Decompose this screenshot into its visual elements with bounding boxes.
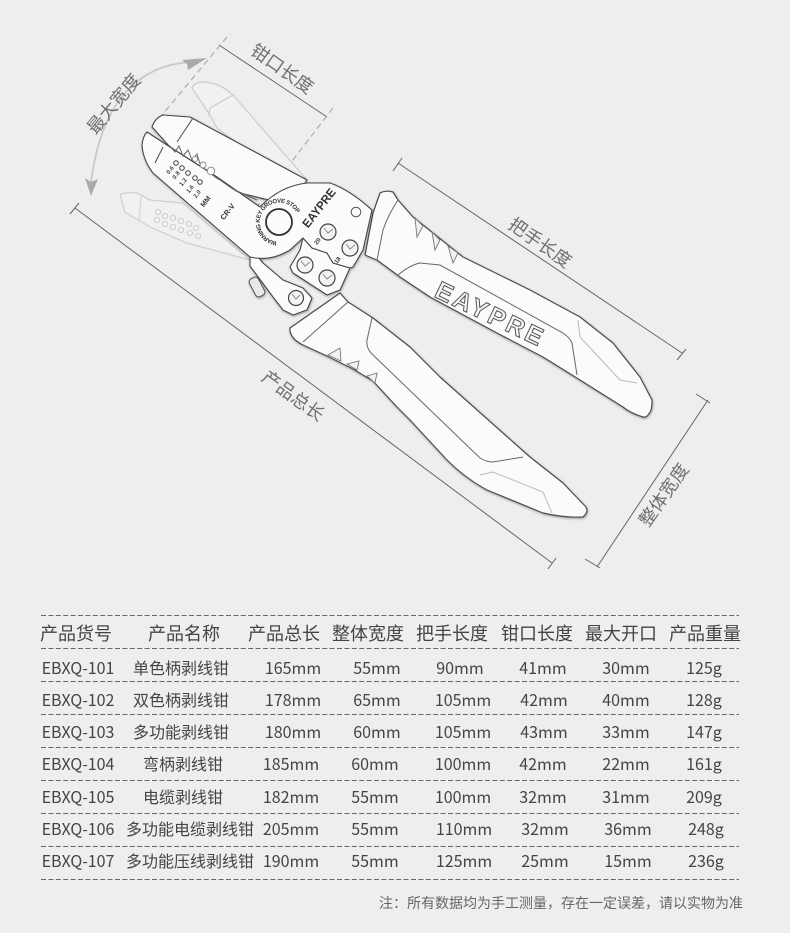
row EBXQ-107: 25mm: [521, 848, 569, 872]
strip size marks: 2.0: [191, 188, 203, 200]
row EBXQ-105: 32mm: [519, 784, 567, 808]
lower handle collar: [303, 302, 348, 342]
row EBXQ-101: [42, 655, 722, 679]
head hole: [351, 207, 361, 217]
brand on handle: EAYPRE: [431, 276, 547, 352]
table header: 整体宽度: [332, 620, 404, 646]
dimension: jaw length: [162, 37, 333, 213]
strip size marks: [164, 164, 203, 200]
row EBXQ-104: 185mm: [263, 751, 319, 775]
strip size marks: 0.6: [164, 164, 176, 176]
lower handle grip ribs: [328, 348, 377, 383]
row EBXQ-103: 多功能剥线钳: [133, 719, 229, 743]
dimension: maximum opening arc: 最大宽度: [80, 67, 146, 139]
row EBXQ-104: [42, 751, 722, 775]
row EBXQ-104: 60mm: [351, 751, 399, 775]
row EBXQ-106: 多功能电缆剥线钳: [126, 816, 254, 840]
table header: 最大开口: [585, 620, 657, 646]
row EBXQ-105: 31mm: [602, 784, 650, 808]
row EBXQ-102: [42, 687, 722, 711]
row EBXQ-101: 125g: [686, 655, 722, 679]
row EBXQ-106: 205mm: [263, 816, 319, 840]
pliers: upper handle: [365, 191, 652, 417]
row EBXQ-107: EBXQ-107: [42, 848, 115, 872]
row EBXQ-106: 248g: [688, 816, 724, 840]
row EBXQ-106: 110mm: [436, 816, 492, 840]
row EBXQ-104: EBXQ-104: [42, 751, 115, 775]
row EBXQ-104: 弯柄剥线钳: [143, 751, 223, 775]
row EBXQ-107: 多功能压线剥线钳: [126, 848, 254, 872]
row EBXQ-104: 22mm: [602, 751, 650, 775]
crimp size labels: 20: [314, 237, 323, 246]
lower handle tip texture: [480, 472, 552, 513]
ghost: open upper jaw: [192, 82, 307, 180]
upper jaw: [152, 115, 307, 205]
row EBXQ-105: [42, 784, 722, 808]
row EBXQ-103: 105mm: [435, 719, 491, 743]
pliers: head and jaws: [140, 114, 374, 318]
row EBXQ-102: EBXQ-102: [42, 687, 115, 711]
footnote: 注：所有数据均为手工测量，存在一定误差，请以实物为准: [379, 893, 743, 913]
table header: 钳口长度: [501, 620, 573, 646]
row EBXQ-102: 40mm: [602, 687, 650, 711]
CR-V mark: CR-V: [218, 202, 237, 222]
row EBXQ-107: 236g: [688, 848, 724, 872]
row EBXQ-107: 125mm: [436, 848, 492, 872]
row EBXQ-102: 双色柄剥线钳: [133, 687, 229, 711]
upper handle collar: [377, 200, 398, 260]
side knob: [248, 276, 266, 298]
row EBXQ-101: 单色柄剥线钳: [133, 655, 229, 679]
row EBXQ-104: 100mm: [435, 751, 491, 775]
dimension: handle length: 把手长度: [504, 211, 578, 273]
table header: 产品名称: [148, 620, 220, 646]
row EBXQ-106: 36mm: [604, 816, 652, 840]
dimension: handle length: [393, 158, 686, 360]
row EBXQ-104: 161g: [686, 751, 722, 775]
strip size marks: 0.8: [170, 169, 182, 181]
upper handle grip ribs: [415, 218, 458, 263]
upper handle tip texture: [578, 320, 637, 383]
row EBXQ-106: EBXQ-106: [42, 816, 115, 840]
lower crimp plate: [290, 238, 350, 295]
row EBXQ-107: 190mm: [263, 848, 319, 872]
head and lower jaw: [142, 132, 372, 268]
spec table: [40, 616, 741, 880]
ghost: open lower jaw: [120, 193, 250, 260]
dimension: overall width: [585, 394, 710, 568]
jaw tip lines: [155, 118, 193, 163]
row EBXQ-105: 电缆剥线钳: [143, 784, 223, 808]
row EBXQ-103: 180mm: [265, 719, 321, 743]
crimp size label 18: 18: [334, 256, 343, 265]
pivot: [266, 209, 292, 235]
strip size holes: [174, 161, 202, 184]
row EBXQ-105: 209g: [686, 784, 722, 808]
table header: 产品总长: [248, 620, 320, 646]
row EBXQ-102: 42mm: [520, 687, 568, 711]
dimension: overall width: 整体宽度: [632, 457, 694, 531]
row EBXQ-103: 147g: [686, 719, 722, 743]
row EBXQ-103: 60mm: [353, 719, 401, 743]
row EBXQ-105: 55mm: [351, 784, 399, 808]
row EBXQ-106: 55mm: [351, 816, 399, 840]
row EBXQ-107: 55mm: [351, 848, 399, 872]
dimension: jaw length: 钳口长度: [246, 37, 320, 99]
row EBXQ-102: 178mm: [265, 687, 321, 711]
table header: 把手长度: [416, 620, 488, 646]
row EBXQ-101: 165mm: [265, 655, 321, 679]
strip size marks: 1.6: [184, 183, 196, 195]
row EBXQ-104: 42mm: [519, 751, 567, 775]
row EBXQ-101: 55mm: [353, 655, 401, 679]
row EBXQ-106: 32mm: [521, 816, 569, 840]
screw slots: [292, 228, 355, 299]
row EBXQ-103: 33mm: [602, 719, 650, 743]
dimension: total length: 产品总长: [257, 364, 330, 427]
row EBXQ-102: 65mm: [353, 687, 401, 711]
row EBXQ-103: 43mm: [520, 719, 568, 743]
dimension: total length: [70, 203, 556, 569]
row EBXQ-107: [42, 848, 724, 872]
dimension: maximum opening arc: [80, 58, 207, 196]
row EBXQ-107: 15mm: [604, 848, 652, 872]
table header: [40, 620, 741, 646]
row EBXQ-105: EBXQ-105: [42, 784, 115, 808]
head logo: EAYPRE: [299, 186, 339, 230]
row EBXQ-101: 90mm: [436, 655, 484, 679]
wire stripping teeth: [170, 146, 257, 200]
MM mark: MM: [200, 195, 213, 209]
row EBXQ-101: 30mm: [602, 655, 650, 679]
table header: 产品重量: [669, 620, 741, 646]
row EBXQ-105: 182mm: [263, 784, 319, 808]
table header: 产品货号: [40, 620, 112, 646]
row EBXQ-105: 100mm: [435, 784, 491, 808]
row EBXQ-102: 128g: [686, 687, 722, 711]
row EBXQ-101: 41mm: [519, 655, 567, 679]
upper handle panel: [398, 263, 577, 375]
pliers: lower handle: [290, 293, 587, 517]
lower handle panel: [367, 318, 523, 462]
link lever: [250, 253, 312, 315]
row EBXQ-101: EBXQ-101: [42, 655, 114, 679]
screws: [288, 224, 358, 306]
strip size marks: 1.2: [177, 176, 189, 188]
strip notch circles: [192, 156, 215, 175]
row EBXQ-103: EBXQ-103: [42, 719, 114, 743]
pivot ring text: WARNING KEY GROOVE STOP: [256, 198, 300, 246]
row EBXQ-106: [42, 816, 724, 840]
row EBXQ-102: 105mm: [435, 687, 491, 711]
row EBXQ-103: [42, 719, 722, 743]
